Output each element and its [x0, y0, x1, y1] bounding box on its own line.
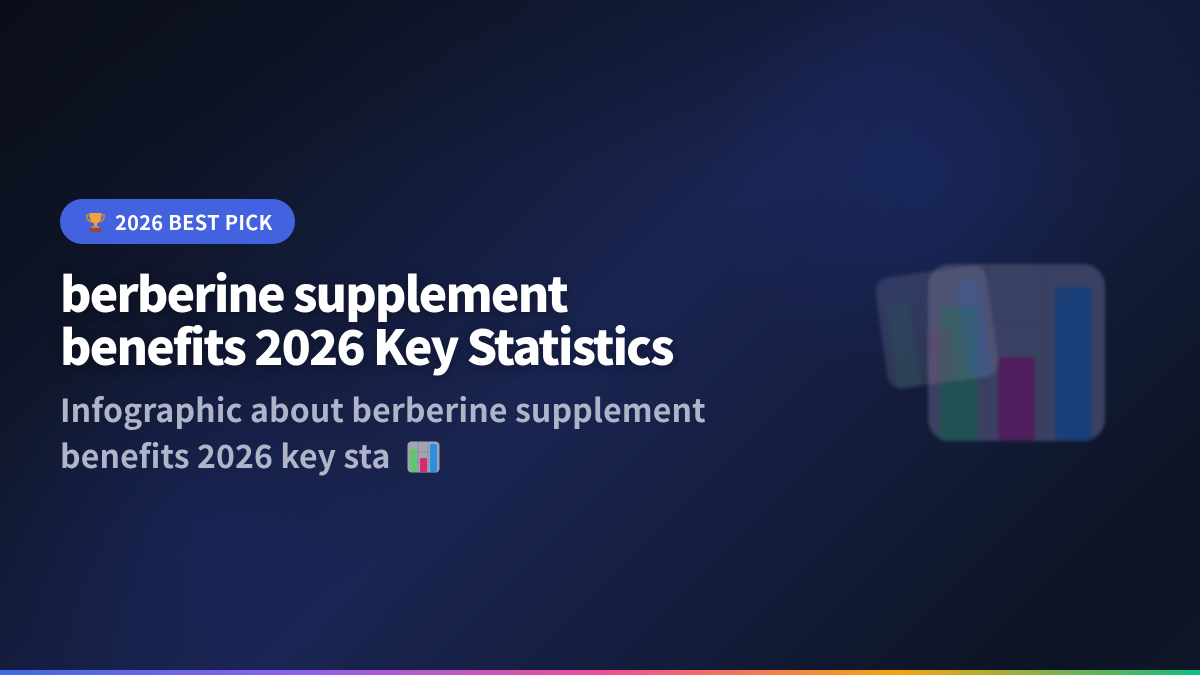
decorative chart icon: small rotated — [875, 266, 999, 390]
rainbow bottom bar — [0, 670, 1200, 675]
badge label: 2026 BEST PICK — [115, 207, 273, 236]
title: benefits 2026 Key Statistics — [60, 309, 673, 379]
subtitle: benefits 2026 key sta — [60, 432, 391, 478]
decorative chart icon: large — [926, 263, 1106, 443]
icon: bar chart emoji — [408, 442, 440, 472]
title: berberine supplement — [60, 256, 567, 326]
title — [60, 256, 674, 379]
badge — [60, 199, 295, 244]
subtitle: Infographic about berberine supplement — [60, 386, 706, 432]
subtitle — [60, 386, 706, 478]
icon: trophy — [86, 213, 105, 232]
